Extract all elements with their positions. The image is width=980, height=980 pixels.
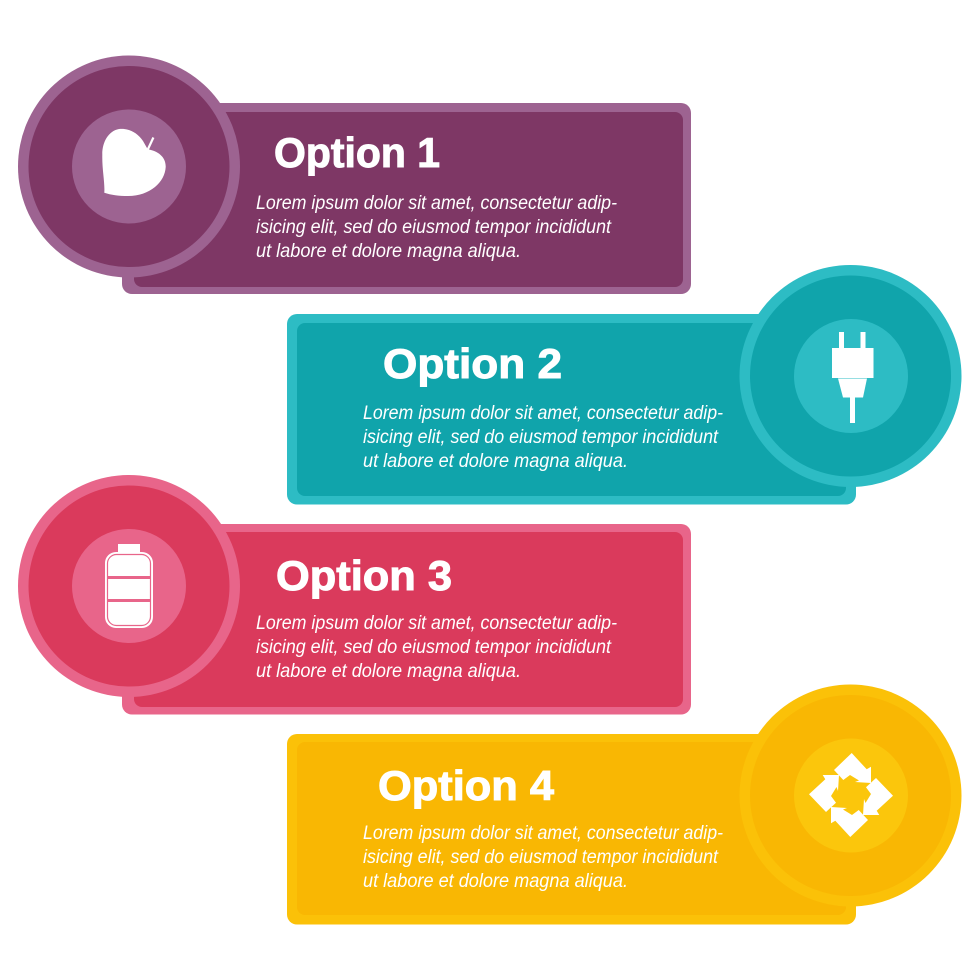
heading: option 1: Option 1	[274, 129, 440, 176]
icon: battery	[105, 544, 153, 628]
heading: option 2: Option 2	[383, 340, 562, 387]
banner: option 3	[122, 524, 691, 714]
text block: option 2: Lorem ipsum dolor sit amet, consectetur adip-	[363, 403, 723, 424]
text block: option 4: ut labore et dolore magna aliqua.	[363, 871, 628, 892]
text block: option 2: ut labore et dolore magna aliqua.	[363, 451, 628, 472]
heading: option 4: Option 4	[378, 762, 555, 809]
panel: option 1	[18, 56, 691, 294]
badge: option 1 circle	[18, 56, 240, 278]
panel: option 4	[287, 684, 962, 924]
heading: option 3: Option 3	[276, 552, 452, 599]
banner: option 2	[287, 314, 856, 504]
badge: option 4 circle	[740, 684, 962, 906]
text block: option 3: ut labore et dolore magna aliqua.	[256, 661, 521, 682]
icon: leaf	[102, 129, 166, 196]
text block: option 1: Lorem ipsum dolor sit amet, consectetur adip-	[256, 193, 617, 214]
banner: option 4	[287, 734, 856, 924]
panel: option 2	[287, 265, 962, 504]
text block: option 3: Lorem ipsum dolor sit amet, consectetur adip-	[256, 613, 617, 634]
text block: option 2	[363, 403, 723, 472]
text block: option 1: ut labore et dolore magna aliqua.	[256, 241, 521, 262]
panel: option 3	[18, 475, 691, 714]
icon: recycle arrows	[809, 753, 893, 837]
banner: option 1	[122, 103, 691, 294]
badge: option 3 circle	[18, 475, 240, 697]
text block: option 3: isicing elit, sed do eiusmod tempor incididunt	[256, 637, 612, 658]
text block: option 2: isicing elit, sed do eiusmod tempor incididunt	[363, 427, 719, 448]
icon: plug	[832, 332, 874, 423]
text block: option 1: isicing elit, sed do eiusmod tempor incididunt	[256, 217, 612, 238]
text block: option 4	[363, 823, 723, 892]
text block: option 3	[256, 613, 617, 682]
text block: option 4: Lorem ipsum dolor sit amet, consectetur adip-	[363, 823, 723, 844]
text block: option 1	[256, 193, 617, 262]
text block: option 4: isicing elit, sed do eiusmod tempor incididunt	[363, 847, 719, 868]
badge: option 2 circle	[740, 265, 962, 487]
